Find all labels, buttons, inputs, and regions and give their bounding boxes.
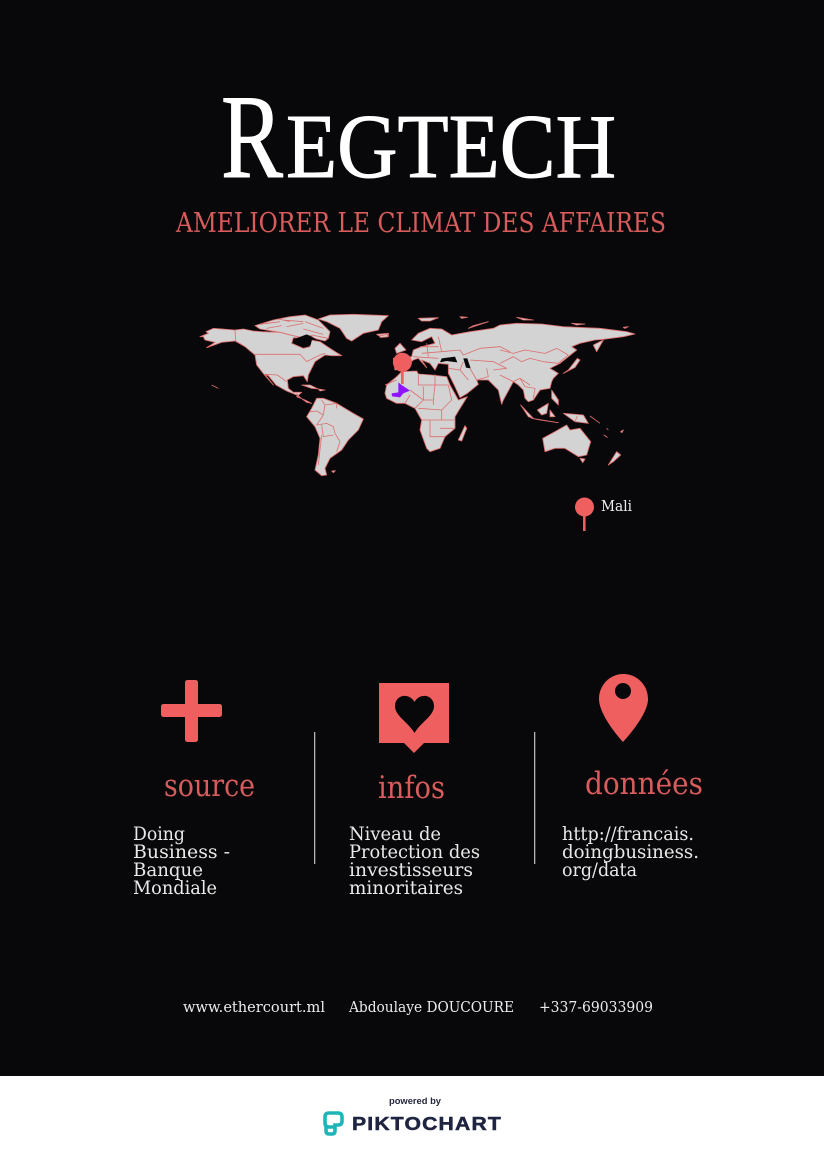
icon: location pin bbox=[599, 674, 648, 742]
text: infos details: Niveau de bbox=[349, 823, 441, 845]
legend pin bbox=[575, 498, 594, 531]
text: infos details: Protection des bbox=[349, 841, 480, 863]
map: Americas bbox=[200, 314, 388, 476]
map: East Asia and Oceania bbox=[500, 317, 628, 465]
text: source details: Mondiale bbox=[133, 877, 217, 899]
icon: speech bubble with heart bbox=[379, 683, 449, 753]
footer contact line: www.ethercourt.ml bbox=[183, 1000, 325, 1016]
column: source bbox=[133, 680, 255, 899]
land: Americas bbox=[200, 314, 388, 476]
hudson bay detail bbox=[293, 334, 313, 348]
heading: infos: infos bbox=[378, 770, 445, 806]
text: données details bbox=[562, 823, 699, 881]
subtitle: AMELIORER LE CLIMAT DES AFFAIRES bbox=[175, 208, 666, 239]
highlighted country: Mali bbox=[392, 382, 410, 397]
heading: données: données bbox=[585, 766, 703, 802]
borders: Africa and Eurasia bbox=[385, 337, 510, 437]
text: données details: http://francais. bbox=[562, 823, 694, 845]
powered by: powered by bbox=[389, 1096, 442, 1107]
wordmark: PIKTOCHART bbox=[352, 1114, 502, 1134]
text: source details: Doing bbox=[133, 823, 185, 845]
world map bbox=[200, 314, 635, 476]
title: EGTECH bbox=[286, 96, 616, 197]
map pin bbox=[393, 353, 412, 384]
heading: source: source bbox=[164, 768, 255, 804]
legend label: Mali bbox=[601, 499, 632, 515]
footer contact line: +337-69033909 bbox=[539, 1000, 653, 1016]
land: Africa and Eurasia bbox=[380, 317, 635, 452]
divider bbox=[534, 732, 535, 864]
icon: Piktochart logo bbox=[325, 1113, 342, 1134]
seas bbox=[440, 357, 471, 368]
text: source details bbox=[133, 823, 230, 899]
land: islands and Australia bbox=[517, 317, 628, 465]
text: infos details bbox=[349, 823, 480, 899]
divider bbox=[314, 732, 315, 864]
branding bar bbox=[0, 1076, 824, 1156]
text: données details: doingbusiness. bbox=[562, 841, 699, 863]
text: infos details: minoritaires bbox=[349, 877, 463, 899]
footer contact line: Abdoulaye DOUCOURE bbox=[348, 1000, 514, 1016]
legend: Mali bbox=[575, 498, 632, 531]
text: données details: org/data bbox=[562, 859, 637, 881]
title bbox=[221, 70, 616, 203]
column: données bbox=[562, 674, 703, 881]
column: infos bbox=[349, 683, 480, 899]
title: R bbox=[221, 70, 283, 203]
text: infos details: investisseurs bbox=[349, 859, 473, 881]
map: Europe, Africa and Asia bbox=[380, 317, 635, 452]
borders: Americas bbox=[212, 319, 340, 465]
borders: East Asia bbox=[500, 348, 608, 430]
footer contact line bbox=[183, 1000, 653, 1016]
icon: plus bbox=[161, 680, 222, 742]
text: source details: Business - bbox=[133, 841, 230, 863]
text: source details: Banque bbox=[133, 859, 203, 881]
